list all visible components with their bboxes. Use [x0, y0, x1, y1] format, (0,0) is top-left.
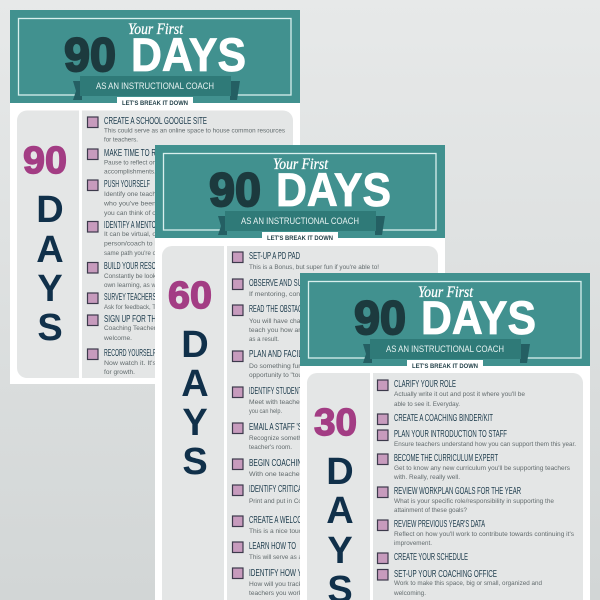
- header banner: AS AN INSTRUCTIONAL COACH: [96, 81, 214, 92]
- item: build your resources: BUILD YOUR RESO: [104, 261, 156, 272]
- item: create a coaching binder/kit: CREATE A COACHING BINDER/KIT: [394, 413, 493, 424]
- item: email a staff: teacher's room.: [249, 445, 292, 451]
- header banner: [155, 145, 445, 238]
- item: review previous year's data: Reflect on how you'll work to contribute towards continuing it's: [394, 532, 574, 538]
- item: identify critical: IDENTIFY CRITICA: [249, 484, 302, 495]
- item: set-up your coaching office: welcoming.: [393, 591, 426, 597]
- item: read the obstacle: as a result.: [249, 337, 279, 343]
- item: push yourself: PUSH YOURSELF: [104, 179, 150, 190]
- item: identify how you: teachers you work: [249, 591, 303, 597]
- item: begin coaching: With one teacher: [249, 472, 302, 478]
- item: create your schedule: [378, 552, 468, 564]
- header banner: 90: [354, 291, 406, 344]
- left column: 90 days: S: [37, 307, 63, 349]
- item: create a school google site: CREATE A SCHOOL GOOGLE SITE: [104, 116, 207, 127]
- left column: 30 days: Y: [327, 530, 353, 572]
- left column: 60 days: S: [182, 441, 208, 483]
- left column: 90 days: Y: [37, 268, 63, 310]
- left column: 30 days: D: [326, 451, 354, 493]
- left column: 90 days: D: [36, 189, 64, 231]
- item: read the obstacle: [232, 304, 302, 343]
- item: plan and facilitate: [232, 349, 302, 379]
- checklist panel: [373, 373, 583, 600]
- item: build your resources: own learning, as w: [104, 283, 157, 289]
- item: observe: If mentoring, cont: [249, 292, 302, 298]
- item: clarify your role: [378, 379, 526, 408]
- item: set-up your coaching office: SET-UP YOUR COACHING OFFICE: [394, 569, 497, 580]
- item: identify a mentor: It can be virtual, o: [104, 232, 157, 238]
- item: read the obstacle: teach you how an: [249, 328, 302, 334]
- item: identify students: Meet with teacher: [249, 400, 302, 406]
- item: review workplan goals: [378, 486, 555, 514]
- left column: 90 days: 90: [23, 140, 67, 182]
- item: survey teachers: [88, 292, 156, 311]
- item: sign up: [88, 314, 156, 342]
- item: identify a mentor: IDENTIFY A MENTO: [104, 220, 156, 231]
- checklist panel: [227, 246, 438, 600]
- item: plan your introduction to staff: PLAN YOUR INTRODUCTION TO STAFF: [394, 429, 507, 440]
- tab: let's break it down: [407, 360, 483, 371]
- header banner: DAYS: [421, 291, 536, 344]
- left column: 90 days: A: [36, 229, 64, 271]
- header banner: [300, 273, 590, 366]
- header banner: AS AN INSTRUCTIONAL COACH: [386, 344, 504, 355]
- tab: let's break it down: LET'S BREAK IT DOWN: [267, 235, 333, 242]
- item: plan your introduction to staff: [378, 429, 576, 448]
- item: read the obstacle: READ 'THE OBSTAC: [249, 304, 302, 315]
- item: record yourself: RECORD YOURSELF: [104, 348, 156, 359]
- header banner: Your First: [128, 21, 183, 38]
- header banner: DAYS: [276, 163, 391, 216]
- item: clarify your role: able to see it. Everyday.: [394, 402, 460, 408]
- item: review workplan goals: attainment of these goals?: [394, 508, 468, 514]
- tab: let's break it down: LET'S BREAK IT DOWN: [412, 363, 478, 370]
- tab: let's break it down: LET'S BREAK IT DOWN: [122, 100, 188, 107]
- item: identify students: you can help.: [249, 409, 282, 415]
- item: clarify your role: Actually write it out and post it where you'll be: [394, 392, 526, 398]
- item: record yourself: for growth.: [104, 370, 135, 376]
- item: make time: Pause to reflect on: [104, 160, 156, 166]
- item: push yourself: you can think of o: [104, 211, 157, 217]
- item: become the curriculum expert: Get to know any new curriculum you'll be supporting teachers: [394, 466, 570, 472]
- panel: 30 days page: [300, 273, 590, 600]
- item: make time: accomplishments.: [104, 170, 156, 176]
- item: push yourself: Identify one teach: [104, 192, 156, 198]
- item: plan and facilitate: opportunity to "tou: [249, 373, 302, 379]
- item: plan and facilitate: Do something fun: [249, 364, 302, 370]
- header banner: [10, 10, 300, 103]
- left column: 60 days: 60: [168, 275, 212, 317]
- item: create a school google site: for teachers.: [104, 138, 138, 144]
- item: create a school google site: This could serve as an online space to house common resources: [104, 128, 285, 134]
- item: identify a mentor: person/coach to l: [104, 242, 156, 248]
- item: identify a mentor: same path you're o: [104, 251, 157, 257]
- header banner: 90: [209, 163, 261, 216]
- item: learn how to: [232, 541, 303, 561]
- item: email a staff: Recognize someth: [249, 436, 302, 442]
- item: become the curriculum expert: [378, 453, 570, 481]
- item: make time: [88, 148, 156, 176]
- item: read the obstacle: You will have chal: [249, 319, 302, 325]
- item: review previous year's data: improvement.: [394, 541, 432, 547]
- header banner: 90: [64, 28, 116, 81]
- item: set-up a pd pad: SET-UP A PD PAD: [249, 251, 300, 262]
- item: review workplan goals: What is your specific role/responsibility in supporting the: [394, 499, 555, 505]
- left column: 60 days: D: [181, 324, 209, 366]
- tab: let's break it down: [262, 232, 338, 243]
- item: become the curriculum expert: BECOME THE CURRICULUM EXPERT: [394, 453, 498, 464]
- item: create a welcome: CREATE A WELCO: [249, 515, 302, 526]
- item: push yourself: who you've been: [103, 202, 156, 208]
- item: plan your introduction to staff: Ensure teachers understand how you can support them this year.: [394, 442, 576, 448]
- left column: 30 days: [307, 373, 370, 600]
- panel: 90 days page: [10, 10, 300, 384]
- item: clarify your role: CLARIFY YOUR ROLE: [394, 379, 456, 390]
- item: record yourself: Now watch it. It's: [104, 361, 156, 367]
- item: push yourself: [88, 179, 157, 217]
- item: identify a mentor: [88, 220, 157, 257]
- left column: 30 days: A: [326, 490, 354, 532]
- item: become the curriculum expert: with. Really, really well.: [393, 475, 460, 481]
- item: identify students: [232, 386, 302, 415]
- item: begin coaching: BEGIN COACHIN: [249, 458, 302, 469]
- item: set-up your coaching office: [378, 569, 542, 597]
- item: observe: [232, 278, 302, 298]
- item: learn how to: LEARN HOW TO: [249, 541, 296, 552]
- panel: 60 days page: [155, 145, 445, 600]
- left column: 30 days: 30: [314, 402, 357, 444]
- item: plan and facilitate: PLAN AND FACIL: [249, 349, 302, 360]
- item: create a school google site: [88, 116, 285, 144]
- item: begin coaching: [232, 458, 302, 478]
- item: sign up: Coaching Teacher: [104, 326, 156, 332]
- header banner: AS AN INSTRUCTIONAL COACH: [241, 216, 359, 227]
- item: create a welcome: This is a nice touc: [249, 529, 302, 535]
- item: learn how to: This will serve as a: [249, 555, 303, 561]
- left column: 60 days: A: [181, 363, 209, 405]
- item: review previous year's data: [378, 519, 574, 547]
- item: make time: MAKE TIME TO R: [104, 148, 156, 159]
- item: identify students: IDENTIFY STUDENT: [249, 386, 302, 397]
- item: sign up: welcome.: [103, 336, 132, 342]
- item: record yourself: [88, 348, 156, 376]
- item: survey teachers: SURVEY TEACHERS: [104, 292, 156, 303]
- item: build your resources: Constantly be look: [104, 274, 157, 280]
- item: identify critical: Print and put in Co: [249, 499, 303, 505]
- item: create a coaching binder/kit: [378, 413, 493, 424]
- header banner: DAYS: [131, 28, 246, 81]
- item: create your schedule: CREATE YOUR SCHEDULE: [394, 552, 468, 563]
- item: email a staff: EMAIL A STAFF 'S: [249, 422, 302, 433]
- item: build your resources: [88, 261, 157, 289]
- item: observe: OBSERVE AND SU: [249, 278, 302, 289]
- item: set-up a pd pad: [232, 251, 379, 271]
- item: sign up: SIGN UP FOR TH: [104, 314, 156, 325]
- left column: 60 days: [162, 246, 224, 600]
- item: identify how you: IDENTIFY HOW Y: [249, 568, 302, 579]
- item: review previous year's data: REVIEW PREVIOUS YEAR'S DATA: [394, 519, 485, 530]
- left column: 60 days: Y: [182, 402, 208, 444]
- item: survey teachers: Ask for feedback, T: [104, 305, 156, 311]
- checklist panel: [82, 110, 293, 378]
- item: identify how you: How will you track: [249, 582, 303, 588]
- item: email a staff: [232, 422, 302, 451]
- left column: 90 days: [17, 110, 79, 378]
- item: create a welcome: [232, 515, 302, 535]
- tab: let's break it down: [117, 97, 193, 108]
- header banner: Your First: [418, 284, 473, 301]
- item: set-up a pd pad: This is a Bonus, but super fun if you're able to!: [249, 265, 379, 271]
- item: identify critical: [232, 484, 303, 505]
- item: set-up your coaching office: Work to make this space, big or small, organized and: [394, 581, 542, 587]
- item: identify how you: [232, 568, 303, 597]
- header banner: Your First: [273, 156, 328, 173]
